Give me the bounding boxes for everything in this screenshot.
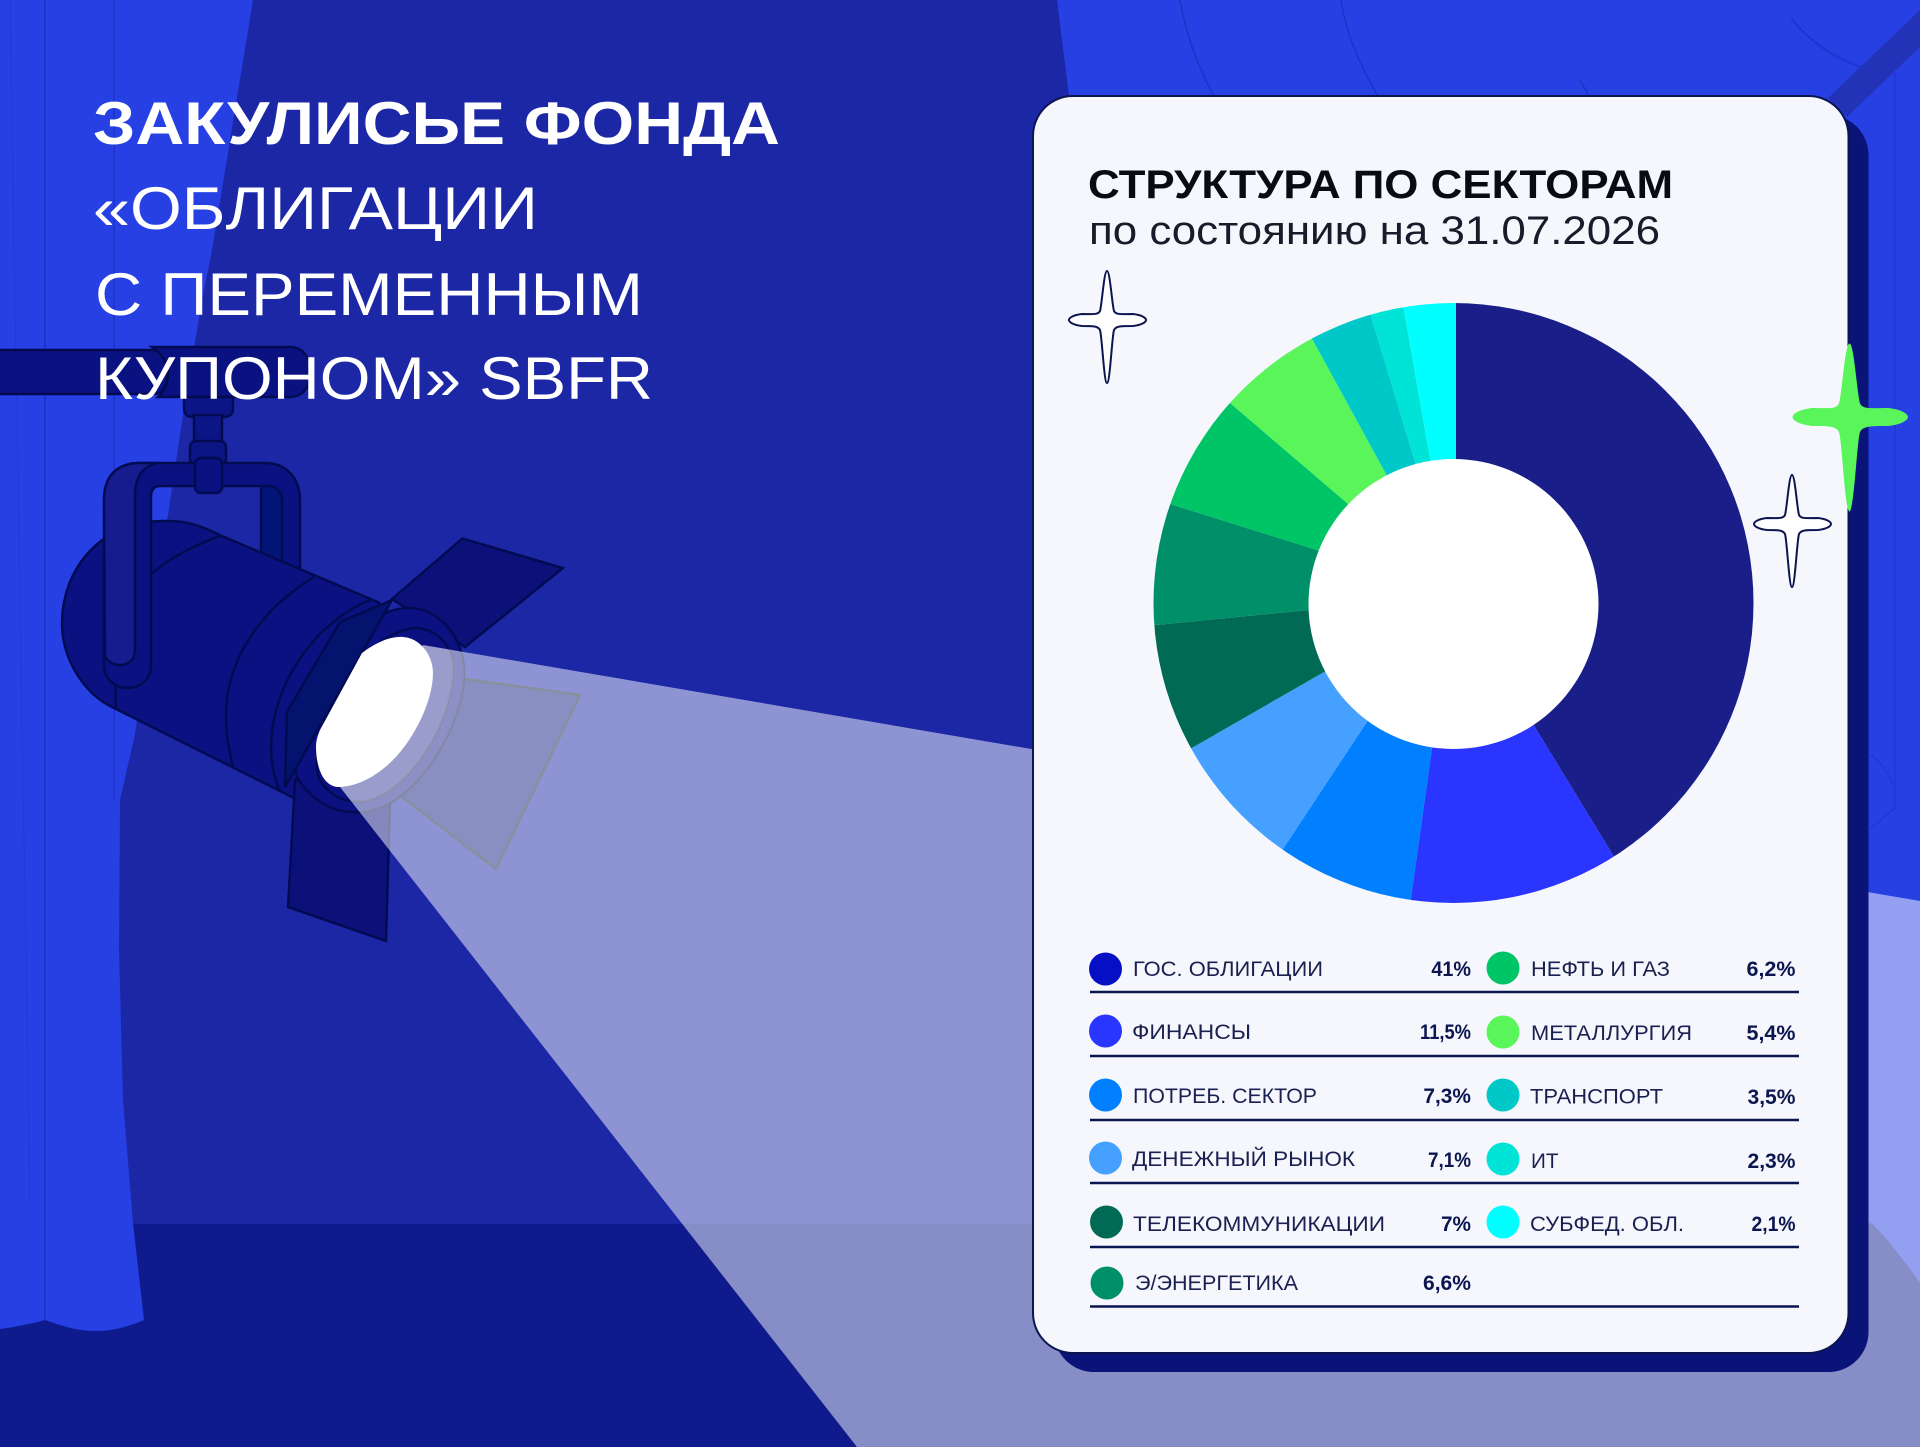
legend item: energy: Э/ЭНЕРГЕТИКА — [1135, 1272, 1298, 1295]
page title: КУПОНОМ» SBFR — [95, 345, 653, 412]
legend item: oil and gas — [1486, 952, 1796, 984]
legend item: gov bonds: 41% — [1431, 958, 1471, 981]
yoke left arm — [104, 458, 222, 688]
lit lens glow — [340, 645, 463, 810]
card panel — [1033, 96, 1848, 1353]
legend item: finance — [1089, 1014, 1471, 1048]
spotlight — [0, 347, 580, 941]
stage floor — [0, 1224, 1920, 1447]
page title: ЗАКУЛИСЬЕ ФОНДА — [93, 90, 780, 157]
card heading — [1088, 163, 1673, 253]
lens ring — [295, 608, 464, 812]
legend item: metallurgy: 5,4% — [1746, 1022, 1796, 1045]
right curtain — [1057, 0, 1920, 1283]
legend item: gov bonds: ГОС. ОБЛИГАЦИИ — [1133, 958, 1323, 981]
donut chart — [1154, 303, 1754, 903]
card heading: СТРУКТУРА ПО СЕКТОРАМ — [1088, 163, 1673, 207]
page title — [93, 90, 780, 412]
yoke right arm — [222, 463, 300, 645]
left curtain — [0, 0, 253, 1331]
bulb — [316, 637, 433, 787]
legend item: telecom — [1090, 1206, 1471, 1238]
legend item: consumer: ПОТРЕБ. СЕКТОР — [1133, 1085, 1317, 1108]
star: green — [1792, 344, 1908, 512]
legend item: telecom: 7% — [1441, 1213, 1471, 1236]
legend item: transport — [1486, 1078, 1796, 1112]
legend item: transport: 3,5% — [1748, 1086, 1796, 1109]
legend item: finance: 11,5% — [1420, 1021, 1471, 1044]
spotlight mounting rod — [0, 350, 168, 394]
legend item: transport: ТРАНСПОРТ — [1530, 1086, 1663, 1108]
light beam — [340, 645, 1920, 1447]
rod sleeve — [152, 347, 311, 397]
legend item: telecom: ТЕЛЕКОММУНИКАЦИИ — [1133, 1213, 1385, 1236]
legend — [1089, 952, 1799, 1306]
spotlight neck — [184, 397, 233, 465]
star: white left — [1069, 271, 1146, 383]
card heading: по состоянию на 31.07.2026 — [1089, 209, 1660, 253]
bottom barn door — [288, 780, 390, 941]
legend item: consumer — [1089, 1078, 1471, 1112]
top barn door — [392, 538, 563, 647]
legend item: finance: ФИНАНСЫ — [1132, 1021, 1251, 1044]
legend item: money market: 7,1% — [1428, 1149, 1471, 1172]
legend item: energy: 6,6% — [1423, 1272, 1471, 1295]
page title: С ПЕРЕМЕННЫМ — [95, 261, 643, 328]
card shadow — [1054, 115, 1868, 1372]
legend item: metallurgy: МЕТАЛЛУРГИЯ — [1531, 1022, 1692, 1045]
legend item: consumer: 7,3% — [1423, 1085, 1471, 1108]
right barn door — [402, 679, 580, 869]
legend item: subfederal bonds: СУБФЕД. ОБЛ. — [1530, 1213, 1684, 1236]
legend item: IT: 2,3% — [1748, 1150, 1796, 1173]
legend item: oil and gas: НЕФТЬ И ГАЗ — [1531, 958, 1670, 981]
legend item: IT: ИТ — [1531, 1150, 1559, 1173]
legend item: money market: ДЕНЕЖНЫЙ РЫНОК — [1132, 1147, 1356, 1171]
legend item: subfederal bonds — [1486, 1206, 1796, 1238]
star: white right — [1754, 475, 1831, 587]
left barn door — [285, 600, 392, 787]
legend item: IT — [1486, 1142, 1796, 1176]
lamp body — [62, 521, 430, 798]
legend item: energy — [1090, 1266, 1471, 1300]
legend item: oil and gas: 6,2% — [1746, 958, 1796, 981]
legend item: money market — [1089, 1142, 1471, 1174]
legend item: subfederal bonds: 2,1% — [1752, 1213, 1796, 1236]
page title: «ОБЛИГАЦИИ — [93, 175, 538, 242]
legend item: metallurgy — [1486, 1016, 1796, 1048]
legend item: gov bonds — [1089, 952, 1471, 986]
